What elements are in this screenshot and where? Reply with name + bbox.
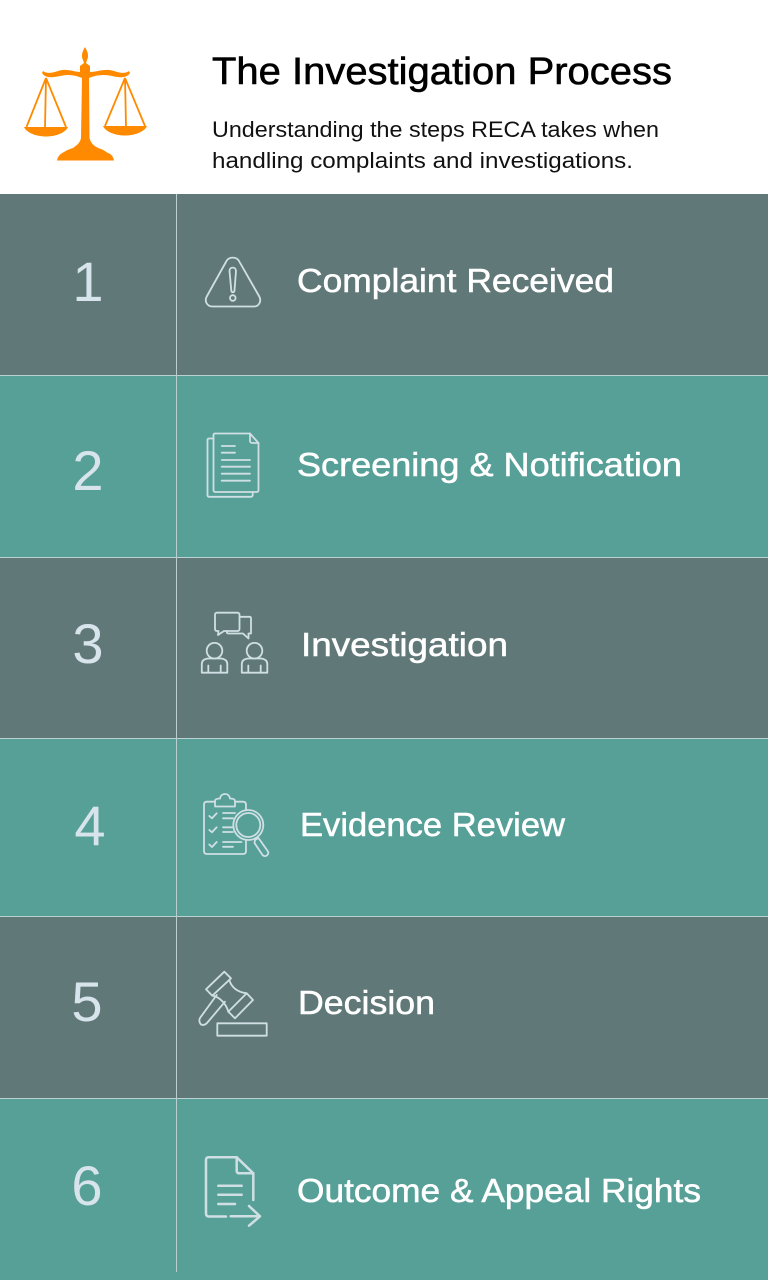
subtitle: handling complaints and investigations. <box>212 148 633 173</box>
step label: Outcome & Appeal Rights <box>297 1172 701 1209</box>
step label: Evidence Review <box>300 806 565 843</box>
step label: Complaint Received <box>297 262 614 299</box>
subtitle: Understanding the steps RECA takes when <box>212 117 659 142</box>
icon: documents <box>208 434 258 497</box>
icon: orange scales of justice <box>24 47 147 160</box>
step number 1: 1 <box>72 250 104 313</box>
step number 2: 2 <box>72 439 104 502</box>
step number 3: 3 <box>72 612 104 675</box>
step number 6: 6 <box>71 1154 103 1217</box>
step label: Decision <box>298 984 435 1021</box>
panel: step 6 <box>0 1099 768 1280</box>
step label: Investigation <box>301 626 508 663</box>
icon: gavel <box>199 972 267 1036</box>
step number 5: 5 <box>71 970 103 1033</box>
step number 4: 4 <box>74 794 106 857</box>
panel: step 5 <box>0 917 768 1098</box>
panel: header <box>24 47 672 173</box>
panel: step 2 <box>0 376 768 557</box>
step label: Screening & Notification <box>297 446 682 483</box>
panel: step 1 <box>0 194 768 375</box>
panel: step 3 <box>0 558 768 738</box>
icon: people talking <box>202 613 267 673</box>
icon: warning triangle <box>206 258 260 306</box>
panel: step 4 <box>0 739 768 916</box>
title: The Investigation Process <box>212 51 672 93</box>
icon: document with arrow <box>206 1157 260 1226</box>
icon: clipboard and magnifier <box>204 794 268 856</box>
subtitle <box>212 117 659 173</box>
